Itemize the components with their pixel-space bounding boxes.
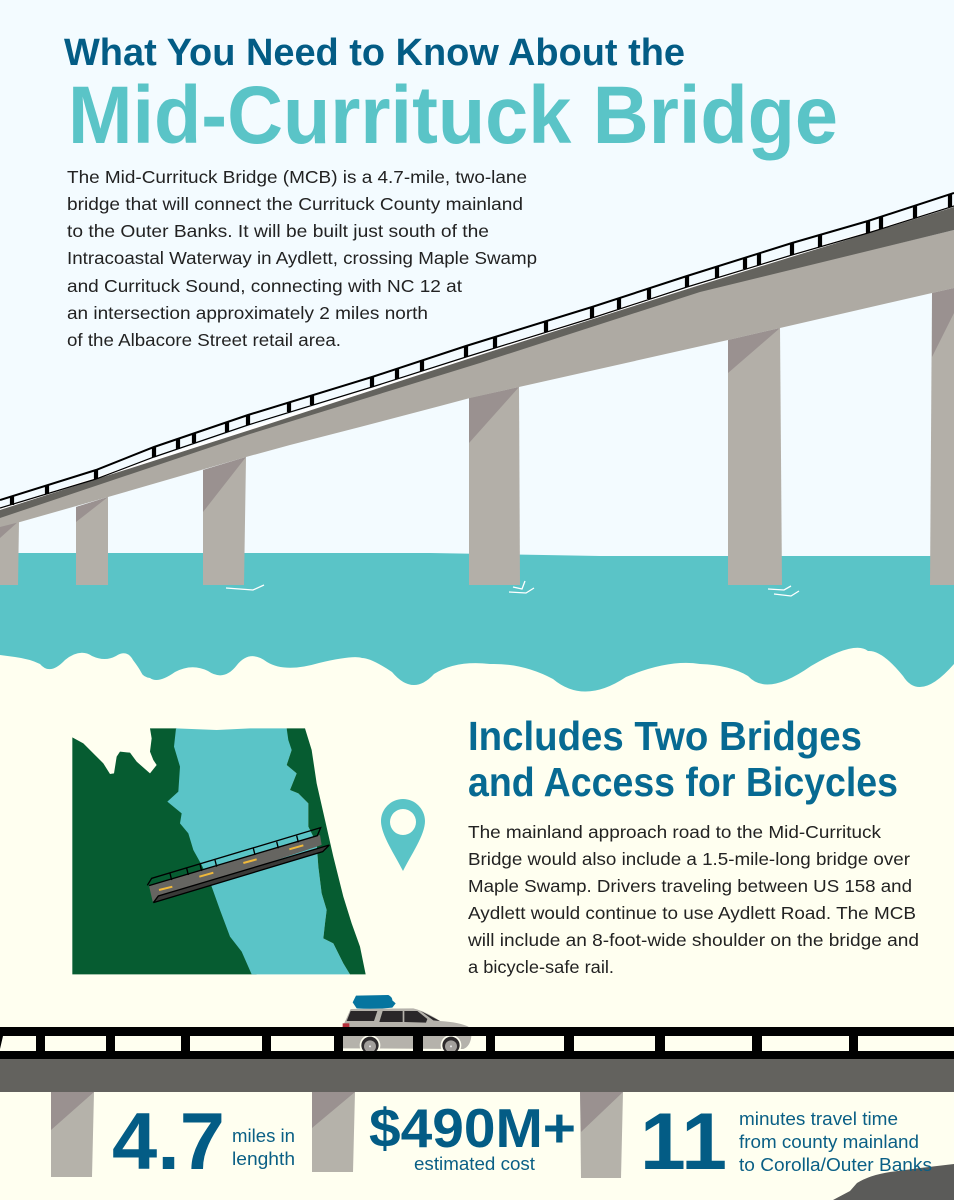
bridge railing	[0, 193, 954, 510]
title: Mid-Currituck Bridge	[68, 70, 838, 161]
section heading: and Access for Bicycles	[468, 759, 898, 805]
stat: length: miles in	[232, 1126, 295, 1146]
lower bridge deck	[0, 1059, 954, 1092]
map: bridge	[147, 828, 329, 903]
stat: cost: estimated cost	[414, 1154, 535, 1174]
intro text block: The Mid-Currituck Bridge (MCB) is a 4.7-mile, two-lane	[67, 167, 527, 187]
bridge deck	[0, 230, 954, 527]
title	[64, 32, 838, 161]
intro text block: Intracoastal Waterway in Aydlett, crossing Maple Swamp	[67, 248, 537, 268]
section text block: The mainland approach road to the Mid-Currituck	[468, 822, 881, 842]
water	[0, 553, 954, 692]
stat: length	[112, 1097, 295, 1187]
section text block: a bicycle-safe rail.	[468, 957, 614, 977]
stat: length: 4.7	[112, 1097, 225, 1187]
intro text block: bridge that will connect the Currituck County mainland	[67, 194, 523, 214]
intro text block: of the Albacore Street retail area.	[67, 330, 341, 350]
stat: travel time: from county mainland	[739, 1132, 919, 1152]
intro text block: and Currituck Sound, connecting with NC 12 at	[67, 276, 462, 296]
lower bridge railing	[0, 1027, 954, 1059]
stat: travel time: minutes travel time	[739, 1109, 898, 1129]
lower piers	[51, 1092, 623, 1178]
bridge piers	[0, 288, 954, 585]
intro text block	[67, 167, 537, 350]
section text block: will include an 8-foot-wide shoulder on the bridge and	[467, 930, 919, 950]
icon: car with roof box	[343, 995, 471, 1056]
map: outer banks	[287, 728, 366, 974]
map: sound water	[167, 728, 350, 974]
stat: travel time: to Corolla/Outer Banks	[739, 1155, 932, 1175]
icon: map pin	[381, 799, 425, 871]
stat: cost: $490M+	[369, 1097, 576, 1159]
title: What You Need to Know About the	[64, 32, 685, 74]
section text block: Maple Swamp. Drivers traveling between US 158 and	[468, 876, 912, 896]
road surface	[0, 206, 954, 518]
map: mainland	[72, 728, 257, 974]
road corner	[833, 1164, 954, 1200]
section text block: Bridge would also include a 1.5-mile-long bridge over	[468, 849, 910, 869]
section text block	[467, 822, 919, 977]
stat: travel time	[640, 1097, 932, 1187]
section text block: Aydlett would continue to use Aydlett Road. The MCB	[468, 903, 916, 923]
section heading	[468, 713, 898, 805]
intro text block: to the Outer Banks. It will be built just south of the	[67, 221, 489, 241]
main bridge illustration	[0, 193, 954, 585]
ripples	[226, 581, 799, 596]
section heading: Includes Two Bridges	[468, 713, 862, 759]
intro text block: an intersection approximately 2 miles north	[67, 303, 428, 323]
stat: length: lenghth	[232, 1149, 295, 1169]
map of bridge location	[72, 728, 366, 974]
stat: travel time: 11	[640, 1097, 727, 1187]
lower bridge	[0, 1027, 954, 1178]
